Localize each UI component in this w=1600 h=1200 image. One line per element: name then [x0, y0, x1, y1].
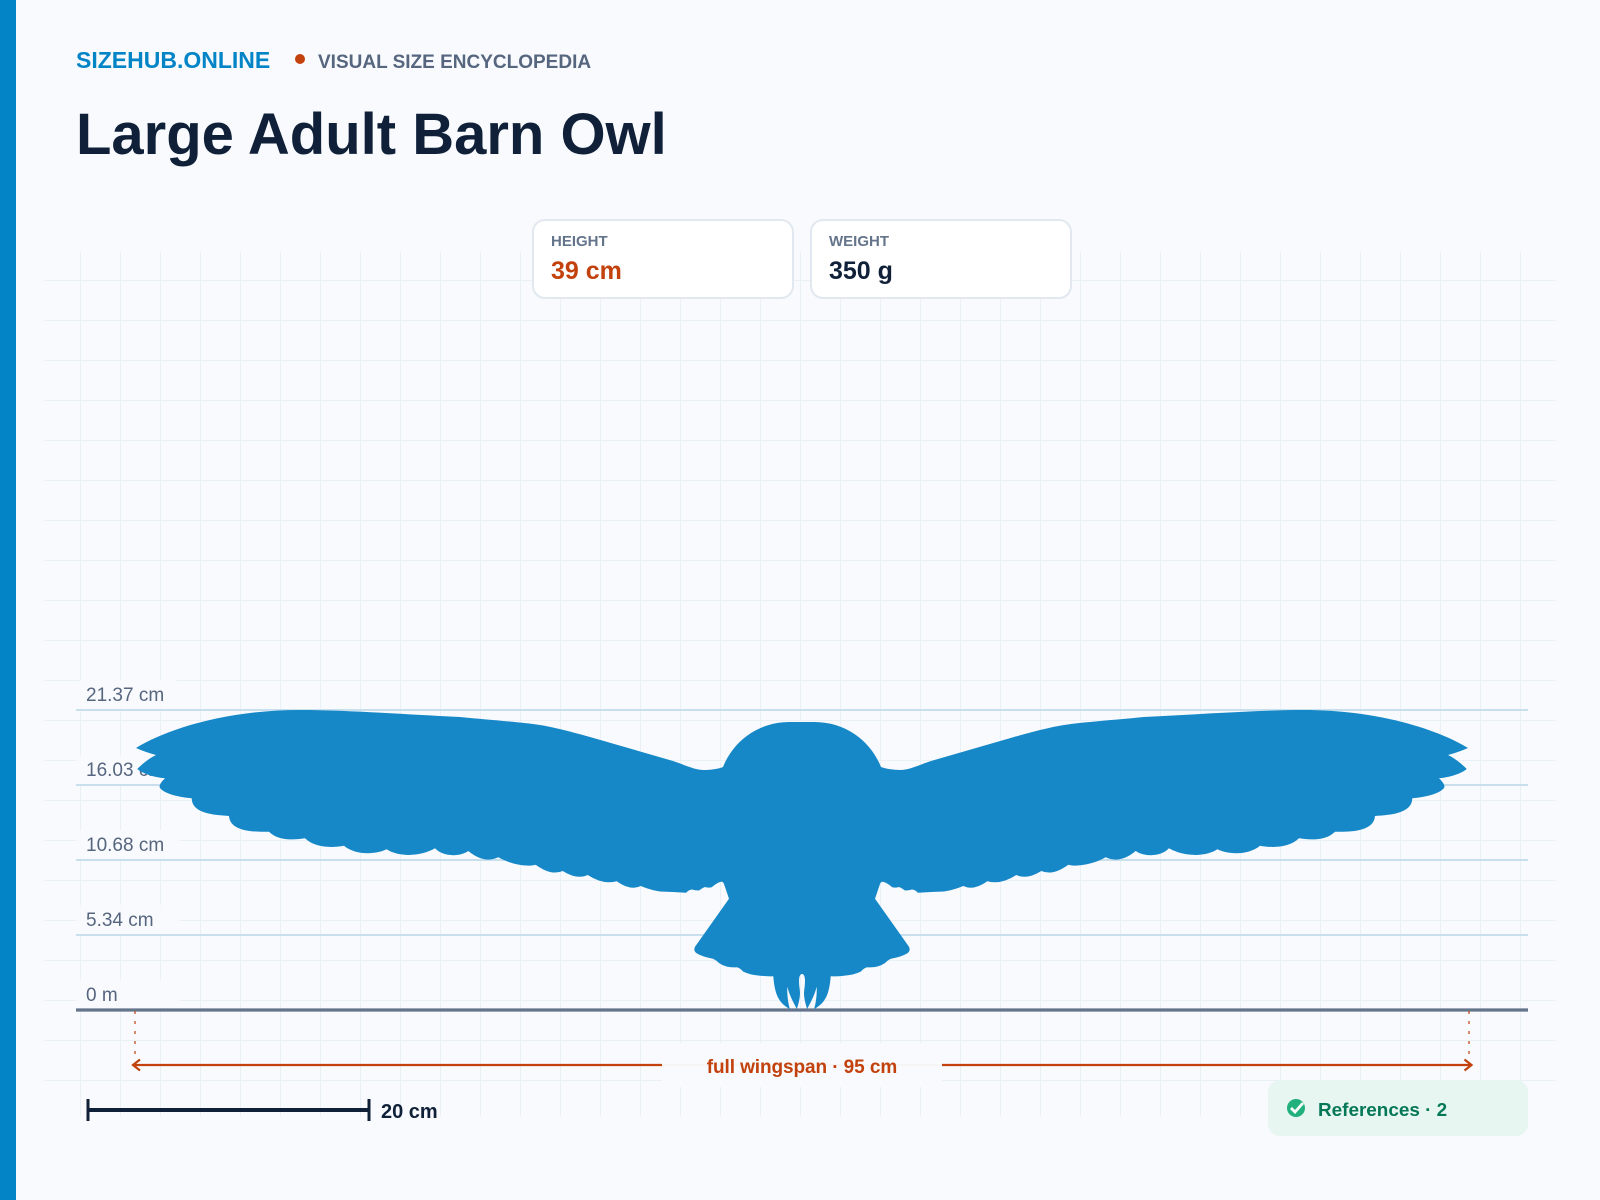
- background measurement grid: [44, 252, 1556, 1116]
- separator dot: [295, 54, 305, 64]
- stat card: weight: 350 g: [829, 257, 893, 285]
- brand name: SIZEHUB.ONLINE: [76, 47, 270, 73]
- owl silhouette: [136, 710, 1468, 1010]
- arrow head left: [133, 1060, 140, 1070]
- left accent bar: [0, 0, 16, 1200]
- ruler label 10.68 cm: 10.68 cm: [86, 835, 164, 856]
- tagline: VISUAL SIZE ENCYCLOPEDIA: [318, 52, 591, 73]
- wingspan label: full wingspan · 95 cm: [707, 1057, 897, 1078]
- title: Large Adult Barn Owl: [76, 102, 667, 167]
- ruler label 5.34 cm: 5.34 cm: [86, 910, 154, 931]
- header: brand line: [76, 47, 591, 73]
- stat card: height: HEIGHT: [551, 233, 608, 250]
- ruler label 16.03 cm: 16.03 cm: [86, 760, 164, 781]
- references badge: References · 2: [1318, 1100, 1447, 1121]
- stat card: weight: WEIGHT: [829, 233, 889, 250]
- arrow head right: [1464, 1060, 1472, 1070]
- ruler label 21.37 cm: 21.37 cm: [86, 685, 164, 706]
- height ruler lines and labels: [76, 680, 1528, 1010]
- stat card: height: [533, 220, 793, 298]
- scale bar: 20 cm: [381, 1101, 438, 1123]
- icon: check circle: [1287, 1099, 1305, 1117]
- stat card: height: 39 cm: [551, 257, 622, 285]
- references badge: [1268, 1080, 1528, 1136]
- wingspan dimension: [133, 1011, 1472, 1087]
- stat card: weight: [811, 220, 1071, 298]
- ruler label 0 m: 0 m: [86, 985, 118, 1006]
